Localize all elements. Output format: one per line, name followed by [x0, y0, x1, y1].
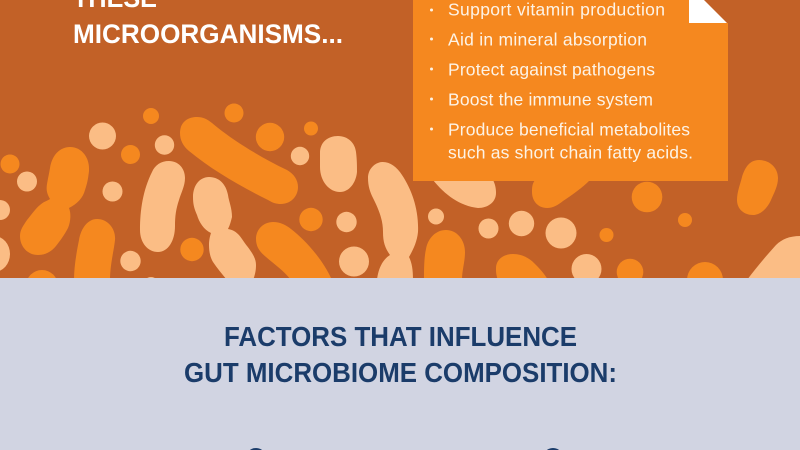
folded corner: [689, 0, 727, 23]
bullet list: Boost the immune system: [448, 90, 653, 110]
heading: factors that influence: FACTORS THAT INFLUENCE: [224, 321, 577, 352]
bullet list: Produce beneficial metabolites: [448, 120, 690, 140]
heading: factors that influence: GUT MICROBIOME COMPOSITION:: [184, 357, 617, 388]
panel: orange background: [0, 0, 800, 278]
light cocci: [0, 122, 602, 293]
heading: these microorganisms: MICROORGANISMS...: [73, 19, 343, 49]
note body: [413, 0, 728, 181]
heading: these microorganisms: [73, 0, 343, 49]
bullet list: Support vitamin production: [448, 0, 665, 20]
bullet list: Aid in mineral absorption: [448, 30, 647, 50]
orange rods: [20, 117, 778, 280]
orange cocci: [0, 104, 723, 302]
heading: factors that influence: [184, 321, 617, 388]
icon: right factor top: [542, 448, 564, 450]
illustration: bacteria and microorganisms: [0, 104, 800, 302]
panel: factors section: [0, 278, 800, 450]
bullet list: such as short chain fatty acids.: [448, 142, 693, 162]
panel: benefits note: [413, 0, 728, 181]
light rods: [140, 136, 800, 280]
icon: left factor top: [245, 448, 267, 450]
bullet list: [430, 0, 693, 162]
bullet list: Protect against pathogens: [448, 60, 655, 80]
